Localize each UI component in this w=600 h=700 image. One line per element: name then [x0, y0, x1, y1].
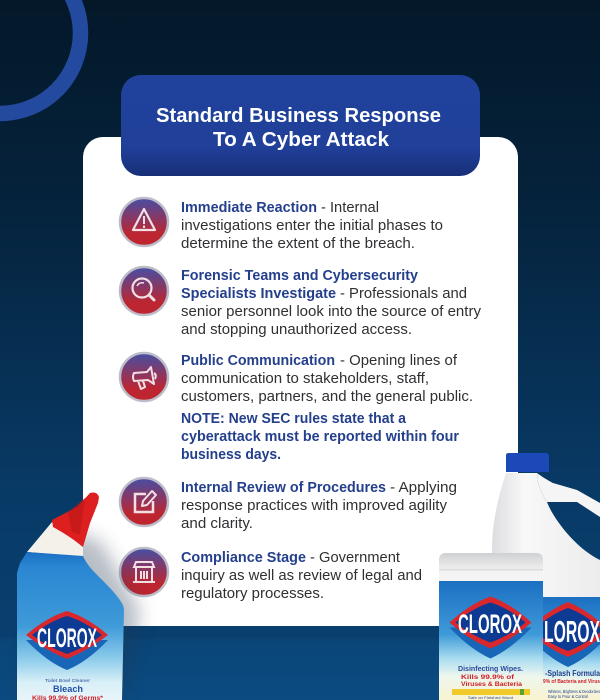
text: internal review: and clarity. — [181, 516, 253, 532]
heading banner: To A Cyber Attack — [213, 129, 390, 151]
icon: magnifying glass — [120, 267, 168, 315]
text: compliance stage: regulatory processes. — [181, 586, 324, 602]
text: compliance stage: Compliance Stage — [181, 550, 306, 566]
text: compliance stage: - Government — [310, 550, 400, 566]
note: SEC rules: NOTE: New SEC rules state that a — [181, 411, 407, 427]
product: disinfecting wipes: Disinfecting Wipes. — [458, 666, 523, 673]
heading banner — [121, 75, 480, 176]
product: disinfecting wipes: Viruses & Bacteria — [461, 682, 523, 688]
text: public communication: customers, partners, and the general public. — [181, 389, 473, 405]
product: bleach jug: Easy to Pour & Control — [548, 694, 588, 699]
text: forensic teams: - Professionals and — [340, 286, 467, 302]
product: disinfecting wipes — [439, 553, 543, 700]
product: toilet bowl cleaner: Bleach — [53, 684, 83, 695]
heading banner: Standard Business Response — [156, 105, 441, 127]
text: internal review: Internal Review of Procedures — [181, 480, 386, 496]
note: SEC rules: business days. — [181, 447, 281, 463]
product: toilet bowl cleaner: CLOROX — [37, 623, 97, 653]
text: immediate reaction: Immediate Reaction — [181, 200, 317, 216]
icon: government building — [120, 548, 168, 596]
panel: response steps card — [83, 137, 518, 626]
product: toilet bowl cleaner: Toilet Bowl Cleaner — [45, 678, 91, 683]
product: disinfecting wipes: Safe on Finished Wood — [468, 695, 513, 700]
text: forensic teams — [181, 268, 482, 338]
text: public communication: communication to stakeholders, staff, — [181, 371, 429, 387]
product: toilet bowl cleaner — [15, 492, 140, 700]
note: SEC rules — [181, 411, 459, 463]
icon: warning triangle — [120, 198, 168, 246]
text: public communication — [181, 353, 473, 405]
text: public communication: - Opening lines of — [340, 353, 458, 369]
text: immediate reaction: investigations enter the initial phases to — [181, 218, 443, 234]
product: bleach jug: 9% of Bacteria and Virus — [543, 679, 600, 685]
icon: edit document — [120, 478, 168, 526]
text: immediate reaction: determine the extent of the breach. — [181, 236, 415, 252]
decorative ring — [0, 0, 80, 114]
text: forensic teams: Specialists Investigate — [181, 286, 336, 302]
text: forensic teams: and stopping unauthorized access. — [181, 322, 412, 338]
text: public communication: Public Communication — [181, 353, 335, 369]
text: compliance stage — [181, 550, 422, 602]
text: immediate reaction: - Internal — [321, 200, 379, 216]
note: SEC rules: cyberattack must be reported within four — [181, 429, 459, 445]
text: compliance stage: inquiry as well as review of legal and — [181, 568, 422, 584]
product: bleach jug — [492, 453, 600, 700]
text: forensic teams: Forensic Teams and Cybersecurity — [181, 268, 418, 284]
text: internal review: - Applying — [390, 480, 457, 496]
text: internal review: response practices with improved agility — [181, 498, 448, 514]
product: disinfecting wipes: Kills 99.9% of — [461, 674, 515, 681]
text: immediate reaction — [181, 200, 443, 252]
text: forensic teams: senior personnel look into the source of entry — [181, 304, 482, 320]
product: disinfecting wipes: CLOROX — [458, 609, 522, 639]
icon: megaphone — [120, 353, 168, 401]
text: internal review — [181, 480, 457, 532]
